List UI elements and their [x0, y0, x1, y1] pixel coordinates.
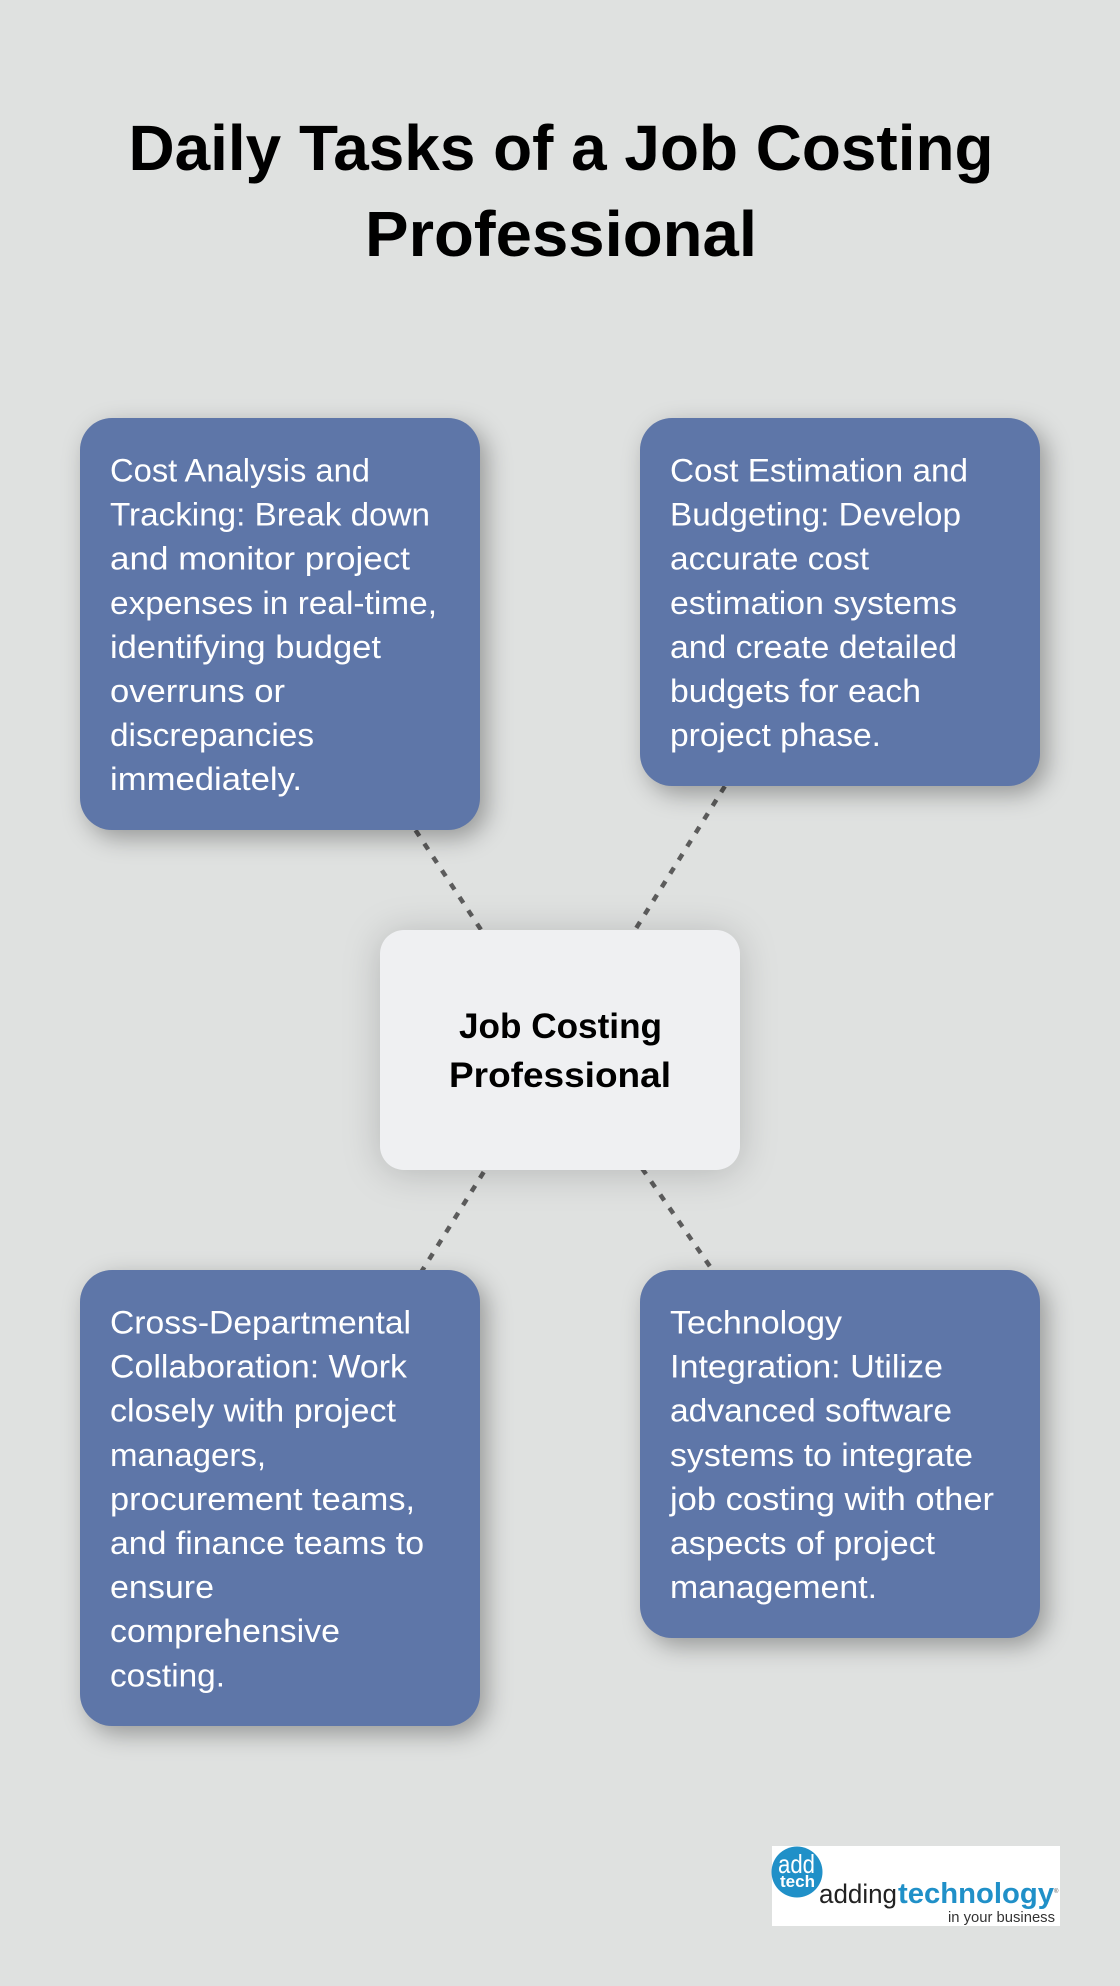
- text: wordmark: ®: [1054, 1888, 1059, 1895]
- text: job costing professional: Job Costing: [459, 1007, 662, 1046]
- text: cost estimation description: Cost Estimation and: [670, 452, 968, 488]
- text: technology description: Technology: [670, 1304, 842, 1340]
- panel: technology integration: [640, 1270, 1040, 1638]
- panel: cost estimation and budgeting: [640, 418, 1040, 786]
- text: tagline: in your business: [948, 1909, 1055, 1926]
- panel: cross-departmental collaboration: [80, 1270, 480, 1726]
- logo: adding technology: [772, 1846, 1060, 1926]
- connector: center to technology integration: [560, 1050, 840, 1454]
- text: collaboration description: closely with project: [110, 1393, 396, 1429]
- text: collaboration description: and finance teams to: [110, 1525, 424, 1561]
- connector: center to cost analysis: [280, 624, 560, 1050]
- text: cost analysis description: [110, 452, 437, 797]
- text: technology description: aspects of project: [670, 1525, 935, 1561]
- text: collaboration description: comprehensive: [110, 1613, 340, 1649]
- text: wordmark: adding: [819, 1879, 897, 1909]
- text: cost analysis description: Cost Analysis and: [110, 452, 370, 488]
- text: technology description: systems to integrate: [670, 1437, 973, 1473]
- panel: cost analysis and tracking: [80, 418, 480, 830]
- text: cost estimation description: [670, 452, 968, 753]
- title: Daily Tasks of a Job Costing: [128, 112, 994, 184]
- text: cost analysis description: immediately.: [110, 761, 302, 797]
- text: collaboration description: costing.: [110, 1657, 225, 1693]
- text: cost analysis description: discrepancies: [110, 717, 314, 753]
- text: technology description: advanced software: [670, 1393, 952, 1429]
- text: cost analysis description: identifying budget: [110, 629, 381, 665]
- text: cost analysis description: Tracking: Break down: [110, 497, 430, 533]
- text: collaboration description: Collaboration: Work: [110, 1349, 408, 1385]
- text: technology description: job costing with other: [669, 1481, 994, 1517]
- text: wordmark: technology: [898, 1878, 1054, 1910]
- icon: add tech circle: [772, 1846, 822, 1898]
- text: job costing professional: [449, 1007, 671, 1095]
- title: Professional: [365, 198, 757, 270]
- text: collaboration description: [110, 1304, 424, 1693]
- text: cost estimation description: project phase.: [670, 717, 881, 753]
- text: collaboration description: procurement teams,: [110, 1481, 415, 1517]
- text: cost estimation description: accurate cost: [670, 541, 869, 577]
- text: wordmark: [819, 1878, 1059, 1910]
- text: job costing professional: Professional: [449, 1056, 671, 1095]
- connector: center to cost estimation: [560, 602, 840, 1050]
- text: collaboration description: managers,: [110, 1437, 266, 1473]
- panel: central node: [380, 930, 740, 1170]
- text: cost estimation description: and create detailed: [670, 629, 957, 665]
- text: cost estimation description: estimation systems: [670, 585, 957, 621]
- connector: center to cross-departmental: [280, 1050, 560, 1498]
- text: cost analysis description: and monitor project: [110, 541, 410, 577]
- text: cost estimation description: budgets for each: [670, 673, 921, 709]
- text: collaboration description: Cross-Departmental: [110, 1304, 411, 1340]
- text: technology description: Integration: Utilize: [670, 1349, 943, 1385]
- title: [128, 112, 994, 270]
- icon: add tech circle: add: [778, 1849, 815, 1879]
- text: collaboration description: ensure: [110, 1569, 214, 1605]
- icon: add tech circle: tech: [780, 1872, 815, 1891]
- text: technology description: [669, 1304, 994, 1605]
- text: cost analysis description: overruns or: [110, 673, 285, 709]
- text: cost estimation description: Budgeting: Develop: [670, 497, 961, 533]
- text: cost analysis description: expenses in real-time,: [110, 585, 437, 621]
- text: technology description: management.: [670, 1569, 877, 1605]
